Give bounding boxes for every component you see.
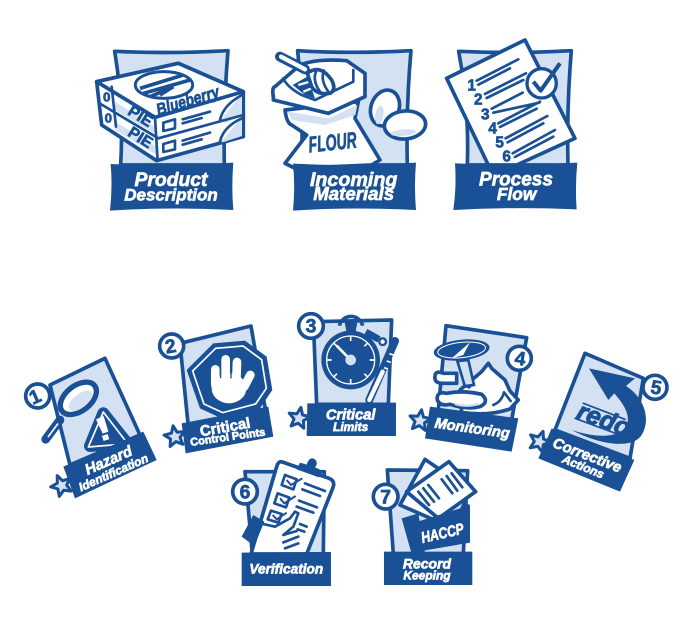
banner: Product Description: Product [134, 170, 209, 191]
banner: Corrective Actions: Corrective [550, 435, 624, 476]
icon: eggs [366, 86, 427, 141]
star [526, 428, 553, 454]
badge: number 6: 6 [240, 482, 251, 503]
banner: Monitoring: Monitoring [434, 416, 511, 442]
icon: numbered checklist [447, 40, 575, 165]
panel: incoming materials background [298, 51, 411, 165]
icon: numbered checklist: 1 [467, 78, 476, 95]
icon: magnifying glass [46, 376, 102, 439]
banner: Hazard Identification: Identification [77, 451, 150, 494]
card: Process Flow [447, 40, 577, 210]
badge: number 2: 2 [164, 336, 178, 359]
star [48, 471, 75, 498]
icon: redo arrow [572, 368, 646, 444]
banner: Incoming Materials: Incoming [310, 169, 397, 191]
icon: HACCP folder: HACCP [420, 521, 466, 547]
panel: control points background [180, 326, 267, 427]
panel: record keeping background [387, 470, 468, 554]
icon: thermometer [369, 341, 395, 400]
card 7: Record Keeping [373, 459, 476, 585]
icon: numbered checklist: 2 [474, 92, 483, 109]
banner: Hazard Identification [63, 432, 157, 498]
icon: stacked pie boxes: 0 [105, 111, 112, 126]
icon: warning triangle [88, 412, 128, 447]
icon: flour sack with scoop [273, 57, 380, 168]
panel: product description background [115, 51, 228, 165]
icon: stop sign with hand [187, 341, 272, 418]
card 1: Hazard Identification [26, 358, 157, 498]
star [408, 408, 432, 431]
badge: number 5 [643, 375, 667, 400]
icon: papers [400, 459, 476, 522]
banner: Corrective Actions [538, 428, 634, 492]
banner: Hazard Identification: Hazard [82, 442, 136, 479]
banner: Product Description [110, 163, 233, 211]
banner: Record Keeping: Record [403, 555, 452, 571]
badge: number 4: 4 [513, 348, 527, 371]
icon: stacked pie boxes: PIE [125, 103, 156, 131]
icon: numbered checklist: 3 [481, 106, 490, 123]
banner: Incoming Materials: Materials [313, 183, 394, 204]
card 2: Critical Control Points [160, 326, 273, 453]
icon: stacked pie boxes: PIE [125, 124, 156, 152]
banner: Corrective Actions: Actions [559, 452, 607, 481]
icon: meat thermometer [433, 337, 491, 389]
card: Product Description [97, 51, 243, 211]
icon: turkey [435, 363, 518, 414]
banner: Critical Limits [307, 403, 396, 436]
panel: critical limits background [313, 320, 392, 404]
card 3: Critical Limits [287, 314, 396, 436]
icon: stacked pie boxes: 0 [103, 90, 110, 105]
banner: Critical Control Points: Control Points [189, 426, 266, 449]
card 6: Verification [233, 458, 334, 586]
badge: number 7: 7 [380, 487, 391, 508]
star [163, 424, 187, 447]
icon: numbered checklist: 4 [488, 120, 497, 137]
icon: numbered checklist: 6 [502, 148, 511, 165]
icon: clipboard [251, 458, 334, 554]
banner: Record Keeping: Keeping [403, 569, 451, 583]
banner: Critical Control Points [182, 407, 273, 453]
panel: process flow background [459, 51, 571, 165]
banner: Critical Control Points: Critical [199, 415, 252, 440]
icon: stopwatch [321, 316, 386, 389]
badge: number 5: 5 [649, 377, 663, 400]
card 5: Corrective Actions [526, 353, 667, 492]
icon: redo arrow: redo [573, 397, 634, 442]
badge: number 1: 1 [26, 386, 45, 409]
panel: hazard background [50, 358, 140, 465]
banner: Critical Limits: Critical [326, 407, 376, 423]
banner: Incoming Materials [293, 163, 416, 211]
icon: stacked pie boxes [97, 63, 243, 161]
banner: Process Flow [453, 163, 577, 210]
banner: Process Flow: Process [479, 169, 553, 190]
card 4: Monitoring [408, 326, 531, 452]
banner: Record Keeping [384, 552, 472, 585]
icon: numbered checklist: 5 [495, 135, 504, 152]
icon: stacked pie boxes: Blueberry [154, 82, 222, 119]
card: Incoming Materials [273, 51, 427, 211]
badge: number 3: 3 [306, 317, 317, 338]
banner: Critical Limits: Limits [333, 420, 369, 434]
panel: monitoring background [438, 326, 527, 420]
panel: verification background [245, 472, 324, 554]
banner: Product Description: Description [124, 186, 218, 205]
icon: flour sack with scoop: FLOUR [307, 127, 358, 157]
panel: corrective actions background [555, 353, 643, 458]
banner: Process Flow: Flow [497, 184, 538, 204]
banner: Verification: Verification [249, 562, 323, 577]
icon: hand holding pen [242, 512, 298, 548]
star [287, 406, 311, 429]
